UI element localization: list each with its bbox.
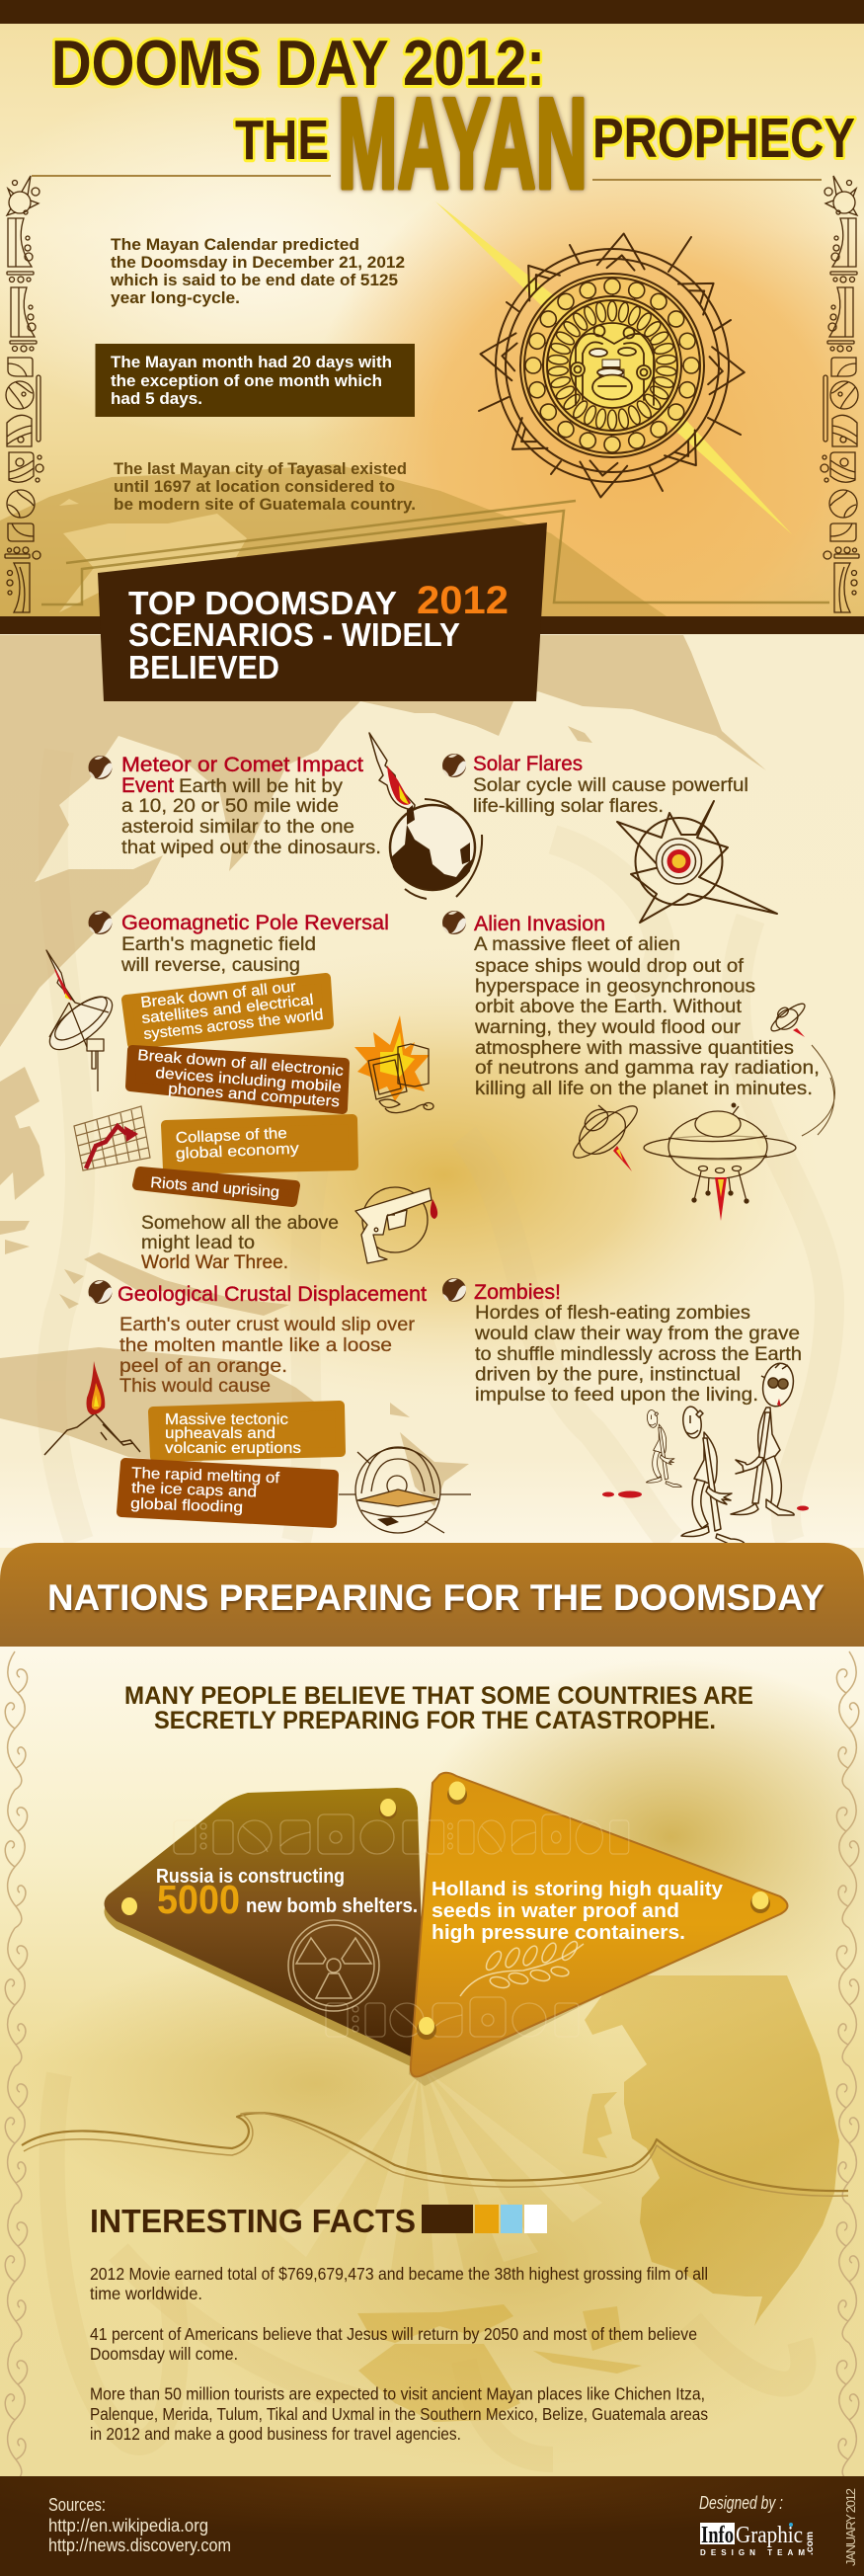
bullet: [89, 1280, 113, 1304]
nations section background: [0, 1647, 864, 2476]
bullet: [442, 754, 466, 777]
scenario: zombies: [442, 1278, 802, 1406]
right glyph column: [821, 176, 859, 612]
world war three text: Somehow all the above: [141, 1213, 339, 1234]
icon: medium ufo: [568, 1099, 643, 1171]
body: that wiped out the dinosaurs.: [121, 838, 381, 858]
text: holland: high pressure containers.: [432, 1922, 685, 1944]
scenario: geomagnetic: [89, 911, 389, 976]
callout: ice caps: the ice caps and: [131, 1480, 257, 1500]
icon: calendar ring of circles: [525, 279, 699, 452]
heading text: [128, 579, 509, 685]
icon: solar star: [617, 801, 777, 923]
panel: holland: [326, 1773, 788, 2086]
panel shape: [105, 1788, 422, 2056]
panel glyph rows: [326, 1814, 629, 2037]
world war three text: [141, 1213, 339, 1273]
panel shape: [411, 1773, 788, 2076]
interesting facts heading: INTERESTING FACTS: [90, 2203, 416, 2239]
icon: large ufo: [644, 1103, 796, 1221]
icon: gun: [355, 1187, 437, 1263]
bullet: [442, 1278, 466, 1302]
heading: Alien Invasion: [474, 913, 605, 935]
heading: Solar Flares: [473, 753, 583, 775]
sun rays: [276, 2069, 602, 2277]
fact three: in 2012 and make a good business for travel agencies.: [90, 2424, 461, 2444]
motion arc: [802, 1045, 835, 1136]
callout: riots: [137, 1171, 295, 1202]
scenario globe silhouette: [0, 635, 766, 1506]
callout: satellites: satellites and electrical: [141, 992, 314, 1027]
fact three: [90, 2384, 708, 2444]
body: Earth's magnetic field: [121, 934, 316, 955]
body: space ships would drop out of: [475, 956, 745, 977]
heading: Meteor or Comet Impact: [121, 754, 363, 776]
callout: satellites: systems across the world: [143, 1006, 324, 1043]
intro text three: [114, 460, 416, 514]
text: russia: 5000: [157, 1877, 240, 1922]
callout: electronic devices: Break down of all electronic: [137, 1047, 345, 1080]
callout: electronic devices: devices including mobile: [155, 1065, 342, 1095]
frame bottom lines: [41, 501, 829, 604]
fact one: 2012 Movie earned total of $769,679,473 and became the 38th highest grossing film of all: [90, 2264, 708, 2284]
title word mayan: MAYAN: [338, 71, 588, 215]
body: [121, 776, 381, 858]
logo: Info: [701, 2523, 734, 2548]
icon: calendar triangles and spikes: [478, 231, 746, 500]
body: of neutrons and gamma ray radiation,: [475, 1058, 820, 1079]
body: Earth's outer crust would slip over: [119, 1315, 416, 1335]
nations banner: [0, 1543, 864, 1647]
heading panel: [98, 523, 547, 701]
icon: volcano: [44, 1361, 140, 1455]
text: holland: seeds in water proof and: [432, 1900, 679, 1922]
intro box dark: the exception of one month which: [111, 372, 382, 390]
callout: tectonic: upheavals and: [165, 1425, 275, 1442]
scenario: solar flares: [442, 753, 748, 817]
body: the molten mantle like a loose: [119, 1335, 392, 1356]
intro box dark: The Mayan month had 20 days with: [111, 354, 392, 371]
text: russia: [156, 1866, 418, 1922]
callout: tectonic: Massive tectonic: [165, 1411, 288, 1428]
fact three: More than 50 million tourists are expected to visit ancient Mayan places like Chichen Itza,: [90, 2384, 705, 2404]
fact one: time worldwide.: [90, 2284, 202, 2303]
callout: ice caps: [121, 1463, 334, 1523]
background swirls: [51, 751, 829, 1541]
header globe light patches: [59, 499, 247, 612]
body: atmosphere with massive quantities: [475, 1038, 794, 1059]
icon: radiation: [288, 1920, 379, 2011]
left glyph column: [5, 176, 43, 612]
body: warning, they would flood our: [474, 1017, 742, 1038]
heading text: BELIEVED: [128, 649, 279, 685]
scenario: geological: [89, 1280, 427, 1397]
header globe silhouette: [0, 464, 667, 616]
fact three: Palenque, Merida, Tulum, Tikal and Uxmal in the Southern Mexico, Belize, Guatemala areas: [90, 2404, 708, 2424]
body: orbit above the Earth. Without: [475, 997, 743, 1017]
icon: middle zombie: [681, 1406, 745, 1544]
body: This would cause: [119, 1376, 271, 1397]
intro text one: year long-cycle.: [111, 289, 240, 307]
icon: calendar rings: [496, 249, 729, 482]
text: holland: Holland is storing high quality: [432, 1879, 724, 1900]
lower globe continents: [357, 1975, 839, 2422]
heading text: 2012: [417, 579, 509, 622]
icon: calendar face: [570, 323, 655, 408]
fact two: Doomsday will come.: [90, 2344, 238, 2364]
bullet: [89, 911, 113, 934]
icon: small ufo: [768, 1000, 808, 1037]
callout: ice caps: global flooding: [130, 1495, 243, 1516]
icon: meteor: [369, 733, 415, 809]
bullet: [89, 756, 113, 779]
nations subheading: MANY PEOPLE BELIEVE THAT SOME COUNTRIES ARE: [124, 1682, 753, 1710]
body: driven by the pure, instinctual: [475, 1365, 741, 1385]
blood spots: [602, 1491, 809, 1511]
nations subheading: SECRETLY PREPARING FOR THE CATASTROPHE.: [154, 1707, 716, 1734]
world war three text: World War Three.: [141, 1252, 288, 1273]
heading second part: Event: [121, 774, 174, 797]
icon: falling chart: [74, 1106, 150, 1170]
bullet: [442, 911, 466, 934]
body: impulse to feed upon the living.: [475, 1385, 758, 1406]
nations banner: NATIONS PREPARING FOR THE DOOMSDAY: [47, 1577, 825, 1618]
text: russia: new bomb shelters.: [246, 1895, 418, 1917]
body: [119, 1315, 416, 1397]
intro box dark: had 5 days.: [111, 390, 202, 408]
panel: russia: [105, 1788, 427, 2066]
callout: electronic devices: phones and computers: [168, 1081, 341, 1110]
fact two: [90, 2324, 697, 2364]
fact two: 41 percent of Americans believe that Jesus will return by 2050 and most of them believe: [90, 2324, 697, 2344]
scenarios section background: [0, 634, 864, 1548]
callout: tectonic: [153, 1406, 341, 1457]
body: [474, 1303, 802, 1406]
world war three text: might lead to: [141, 1233, 255, 1253]
heading: Geological Crustal Displacement: [118, 1283, 427, 1306]
body: Solar cycle will cause powerful: [473, 775, 748, 796]
body: A massive fleet of alien: [474, 934, 680, 955]
callout: tectonic: volcanic eruptions: [165, 1440, 301, 1457]
beam of light: [435, 201, 792, 534]
title word the: THE: [235, 109, 329, 172]
sources: http://news.discovery.com: [48, 2536, 231, 2555]
icon: big zombie: [731, 1360, 797, 1515]
body: would claw their way from the grave: [474, 1324, 800, 1344]
body: life-killing solar flares.: [473, 796, 664, 817]
icon: wheat: [460, 1939, 584, 1996]
body: Hordes of flesh-eating zombies: [475, 1303, 750, 1324]
heading: Geomagnetic Pole Reversal: [121, 912, 389, 934]
heading text: TOP DOOMSDAY: [128, 585, 397, 621]
callout: economy: global economy: [175, 1141, 299, 1163]
callout: ice caps: The rapid melting of: [131, 1465, 280, 1487]
callout: riots: Riots and uprising: [150, 1174, 280, 1201]
intro text three: The last Mayan city of Tayasal existed: [114, 460, 407, 478]
logo: Graphic: [736, 2523, 803, 2548]
middle dark band: [0, 616, 864, 634]
icon: small zombie: [646, 1409, 681, 1487]
body: killing all life on the planet in minutes.: [475, 1079, 813, 1099]
panel shadow: [105, 1795, 422, 2066]
date: JANUARY 2012: [843, 2488, 858, 2566]
nations subheading: [124, 1682, 753, 1734]
footer band: [0, 2476, 864, 2576]
icon: mayan sun calendar: [478, 231, 746, 500]
body: asteroid similar to the one: [121, 817, 354, 838]
logo: [700, 2523, 816, 2557]
intro text one: which is said to be end date of 5125: [110, 272, 398, 289]
icon: earth: [390, 799, 482, 899]
intro text one: the Doomsday in December 21, 2012: [111, 254, 405, 272]
wavy ribbon: [22, 2113, 848, 2196]
sources: [48, 2495, 231, 2555]
icon: exploding computer: [354, 1015, 433, 1113]
icon: satellite dish: [41, 950, 120, 1091]
heading text: SCENARIOS - WIDELY: [128, 616, 460, 653]
callout: electronic devices: [130, 1047, 345, 1110]
body: [120, 934, 316, 976]
body: a 10, 20 or 50 mile wide: [121, 796, 339, 817]
logo: DESIGN TEAM: [700, 2548, 805, 2557]
callout: economy: Collapse of the: [175, 1125, 287, 1147]
intro box dark: [95, 344, 415, 417]
callout: satellites: [126, 978, 329, 1044]
intro text one: The Mayan Calendar predicted: [111, 236, 359, 254]
sources: http://en.wikipedia.org: [48, 2516, 208, 2536]
intro text three: be modern site of Guatemala country.: [114, 496, 416, 514]
body: Earth will be hit by: [179, 776, 344, 797]
body: will reverse, causing: [120, 955, 300, 976]
fact one: [90, 2264, 708, 2303]
callout: economy: [166, 1119, 353, 1169]
body: to shuffle mindlessly across the Earth: [475, 1344, 802, 1365]
right flourish border: [836, 1651, 859, 2481]
icon: calendar petals: [548, 301, 676, 430]
intro text three: until 1697 at location considered to: [114, 478, 395, 496]
sources: Sources:: [48, 2495, 106, 2515]
designed by: Designed by :: [699, 2493, 783, 2513]
scenario: meteor: [89, 754, 381, 858]
text: russia: Russia is constructing: [156, 1866, 345, 1888]
body: [474, 934, 820, 1099]
logo: .com: [805, 2532, 816, 2555]
icon: earth cross-section: [339, 1447, 471, 1533]
panel rivets: [121, 1782, 770, 2040]
frame top lines: [32, 176, 822, 180]
intro text one: [110, 236, 405, 307]
heading: Zombies!: [474, 1281, 561, 1304]
body: hyperspace in geosynchronous: [475, 976, 755, 998]
panel glyph row: [174, 1814, 427, 1854]
left flourish border: [5, 1651, 28, 2481]
colour swatches: [422, 2205, 547, 2233]
bottom swirls: [52, 2074, 803, 2459]
callout: satellites: Break down of all our: [140, 979, 297, 1011]
text: holland: [432, 1879, 724, 1944]
scenario: alien invasion: [442, 911, 820, 1099]
title line one: DOOMS DAY 2012:: [51, 27, 545, 99]
body: peel of an orange.: [119, 1356, 287, 1377]
panel shadow: [409, 1783, 780, 2086]
top dark bar: [0, 0, 864, 24]
header background: [0, 24, 864, 731]
body: [473, 775, 748, 817]
